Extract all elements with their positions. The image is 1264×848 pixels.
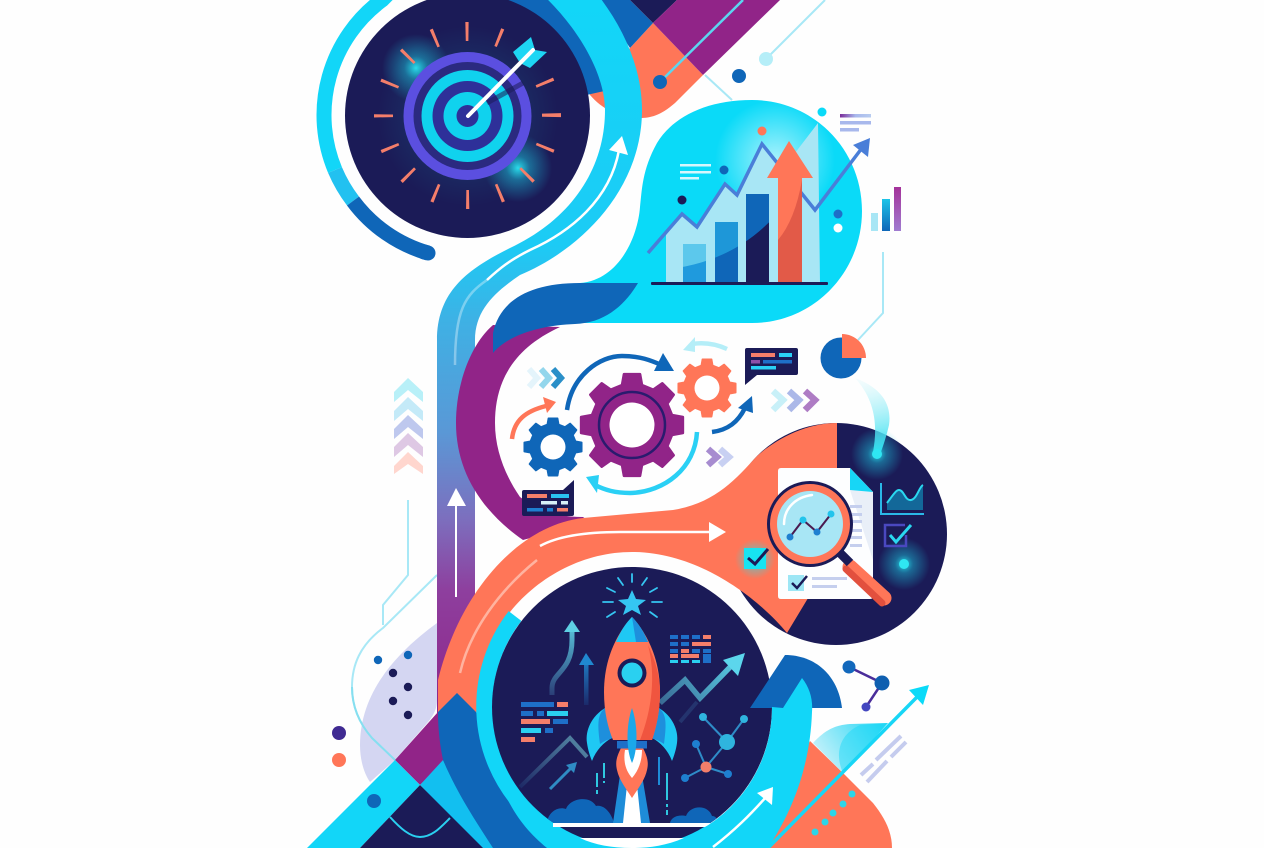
speech box: lower	[522, 480, 574, 516]
exhaust beam	[613, 775, 650, 823]
panel: process gears	[512, 337, 815, 516]
lavender blob	[360, 623, 437, 782]
paper checkbox	[788, 575, 807, 591]
arrow: pale cyan	[683, 337, 727, 352]
outer ring around target	[324, 0, 428, 253]
mini bar chart	[871, 187, 901, 231]
right checkbox	[885, 525, 911, 546]
lavender dashes	[861, 736, 906, 782]
cyan triangle	[307, 760, 420, 848]
arrow: curved white on band	[455, 136, 628, 365]
blob: chart background	[520, 100, 862, 323]
chevrons: right	[773, 391, 815, 410]
bullseye rings	[404, 52, 532, 180]
rocket disc	[492, 567, 772, 847]
panel: rocket launch	[492, 567, 772, 848]
arrow in bullseye	[468, 37, 547, 116]
launch pad	[553, 823, 710, 827]
zigzag arrow: right	[660, 653, 745, 703]
body	[604, 617, 660, 740]
note lines	[680, 164, 711, 180]
deep blue crescent	[438, 693, 570, 848]
pie chart	[820, 334, 866, 378]
line arrow head	[853, 138, 870, 157]
dot: coral	[332, 753, 346, 767]
magnifier	[768, 482, 884, 603]
dot cluster	[374, 651, 412, 719]
bottom-right shapes	[748, 660, 929, 848]
gear: blue	[524, 418, 582, 476]
top-right geometric shapes	[585, 0, 780, 118]
dot: purple	[332, 726, 346, 740]
cyan arrow with line	[768, 685, 929, 848]
molecule icon	[842, 660, 890, 712]
data rows: left	[521, 702, 568, 742]
data grid: right	[670, 635, 711, 663]
motion dashes	[597, 757, 667, 815]
dot: blue on triangle	[367, 794, 381, 808]
glowing tail	[855, 378, 890, 452]
nozzle	[617, 741, 647, 748]
pale curved stripe on coral	[460, 560, 537, 673]
mid-blue wedge	[420, 760, 500, 848]
chevrons: upper left	[529, 369, 561, 387]
window	[618, 658, 646, 688]
arrow: vertical white on band	[447, 488, 466, 597]
rocket	[587, 617, 677, 798]
coral swoosh around rocket and analysis	[438, 423, 837, 712]
navy block	[630, 0, 677, 23]
network graph	[681, 713, 748, 782]
dots on coral	[812, 790, 856, 836]
coral hill	[748, 741, 892, 848]
target disc	[345, 0, 590, 238]
rocket ring	[484, 616, 712, 848]
chart dots	[678, 108, 842, 232]
bars	[683, 194, 769, 282]
arrow: dark blue	[712, 396, 753, 432]
gear: purple	[581, 374, 683, 476]
speech box: upper	[745, 348, 798, 385]
sun-ray ticks	[384, 32, 552, 200]
line with blue node	[660, 0, 743, 82]
blue swoosh	[493, 283, 638, 353]
clouds	[547, 799, 719, 823]
arrow: coral	[512, 397, 556, 439]
panel: analysis disc	[725, 423, 947, 645]
coral arrow	[767, 141, 813, 282]
centre fin	[628, 708, 636, 763]
paper	[778, 468, 873, 599]
paper text lines	[812, 505, 862, 588]
small arrow	[550, 762, 577, 789]
ring segment: blue upper right	[505, 0, 600, 92]
mini area chart	[881, 483, 924, 514]
arrow: blue over gear	[567, 353, 674, 410]
blue block	[598, 0, 653, 48]
glow: analysis dots	[851, 428, 903, 480]
glow nodes	[872, 449, 882, 459]
node: pale dot	[759, 52, 773, 66]
rising line	[648, 144, 862, 253]
floating checkbox	[735, 539, 775, 579]
gear: coral	[678, 359, 736, 417]
navy triangle	[360, 785, 483, 848]
fins	[587, 708, 612, 761]
main flowing band	[437, 0, 642, 720]
arrow: cyan lower	[586, 432, 697, 493]
background line: top connectors	[352, 0, 883, 760]
star burst	[603, 574, 662, 617]
purple swoosh	[456, 325, 590, 540]
cyan wedge on ring	[690, 678, 812, 848]
purple diamond	[395, 712, 460, 785]
cyan curve in navy	[390, 817, 450, 837]
arrow: white on coral	[540, 522, 726, 546]
arrow: white lower right	[713, 787, 773, 847]
flame	[616, 748, 648, 798]
purple diagonal	[653, 0, 780, 75]
rising arrow: straight	[579, 653, 594, 705]
zigzag trace: left	[520, 738, 587, 787]
nose	[616, 617, 648, 642]
pale cyan wedge	[813, 723, 888, 773]
coral block	[585, 23, 703, 118]
legend lines beside chart	[840, 114, 871, 132]
chevrons: lower	[708, 449, 729, 465]
chart highlight	[715, 100, 835, 220]
line over lavender	[352, 687, 395, 760]
panel: analysis document	[735, 378, 930, 603]
bottom-left shapes	[307, 623, 570, 848]
panel: target	[345, 0, 590, 238]
rising arrow: left curved	[552, 620, 580, 695]
base stripe	[580, 838, 684, 848]
panel: growth chart	[648, 100, 870, 285]
node: blue dot on coral	[653, 75, 667, 89]
shadow stripe	[680, 702, 697, 722]
blue arrow-shaped arc	[750, 655, 842, 708]
chevrons: left column	[394, 378, 423, 474]
pale mountain area	[666, 123, 820, 283]
baseline	[651, 282, 828, 285]
node: blue dot	[732, 69, 746, 83]
glow spots	[382, 34, 450, 102]
